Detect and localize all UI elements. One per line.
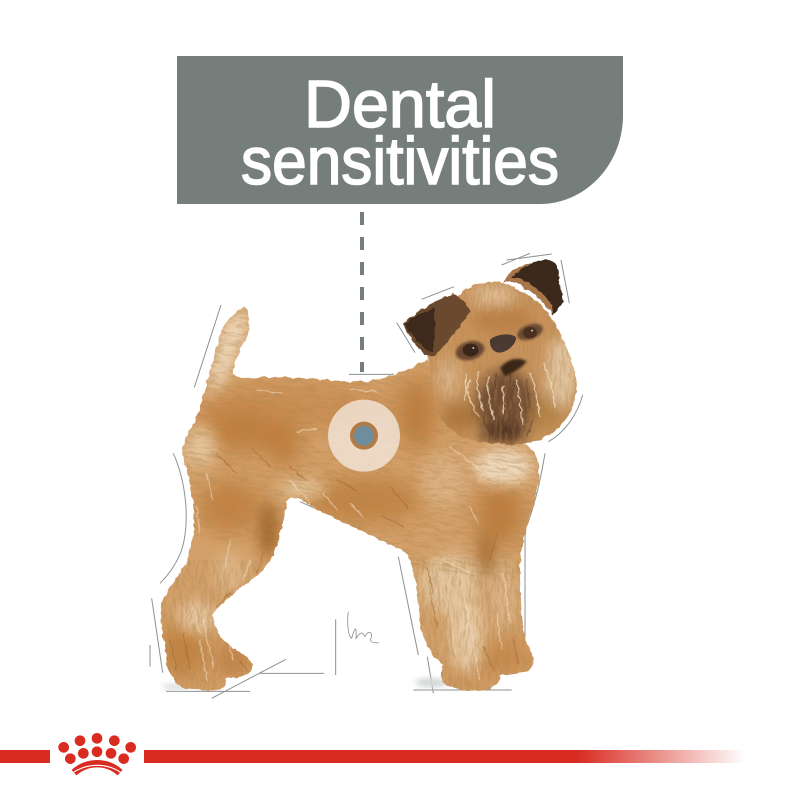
mouth: [500, 359, 527, 377]
right ear: [503, 260, 563, 315]
fur texture: [182, 309, 540, 582]
marker circle: [328, 400, 400, 472]
eye right: [515, 321, 545, 343]
red line left: [0, 750, 50, 763]
panel background: [177, 56, 623, 204]
foot shadows: [162, 678, 448, 689]
red line right fading: [144, 750, 746, 763]
head fur texture: [431, 281, 576, 444]
heading: sensitivities: sensitivities: [241, 124, 559, 199]
dog figure: [160, 259, 578, 691]
title panel: [177, 56, 623, 204]
dashed connector line: [360, 212, 364, 372]
head: [427, 281, 578, 446]
signature: [348, 612, 378, 643]
left ear: [403, 293, 470, 356]
ring: [350, 422, 378, 450]
nose: [490, 334, 516, 353]
heading: Dental: Dental: [304, 67, 496, 142]
logo: crown: [58, 733, 136, 773]
dog illustration: [150, 252, 584, 699]
beard hairs: [465, 363, 555, 423]
footer band: [0, 733, 746, 773]
centre dot: [354, 426, 374, 446]
fur strands: [193, 390, 510, 680]
halo: [328, 400, 400, 472]
leg fur texture: [160, 560, 531, 691]
sketch lines: [150, 253, 583, 698]
body and legs: [160, 306, 540, 691]
eye left: [453, 338, 487, 363]
